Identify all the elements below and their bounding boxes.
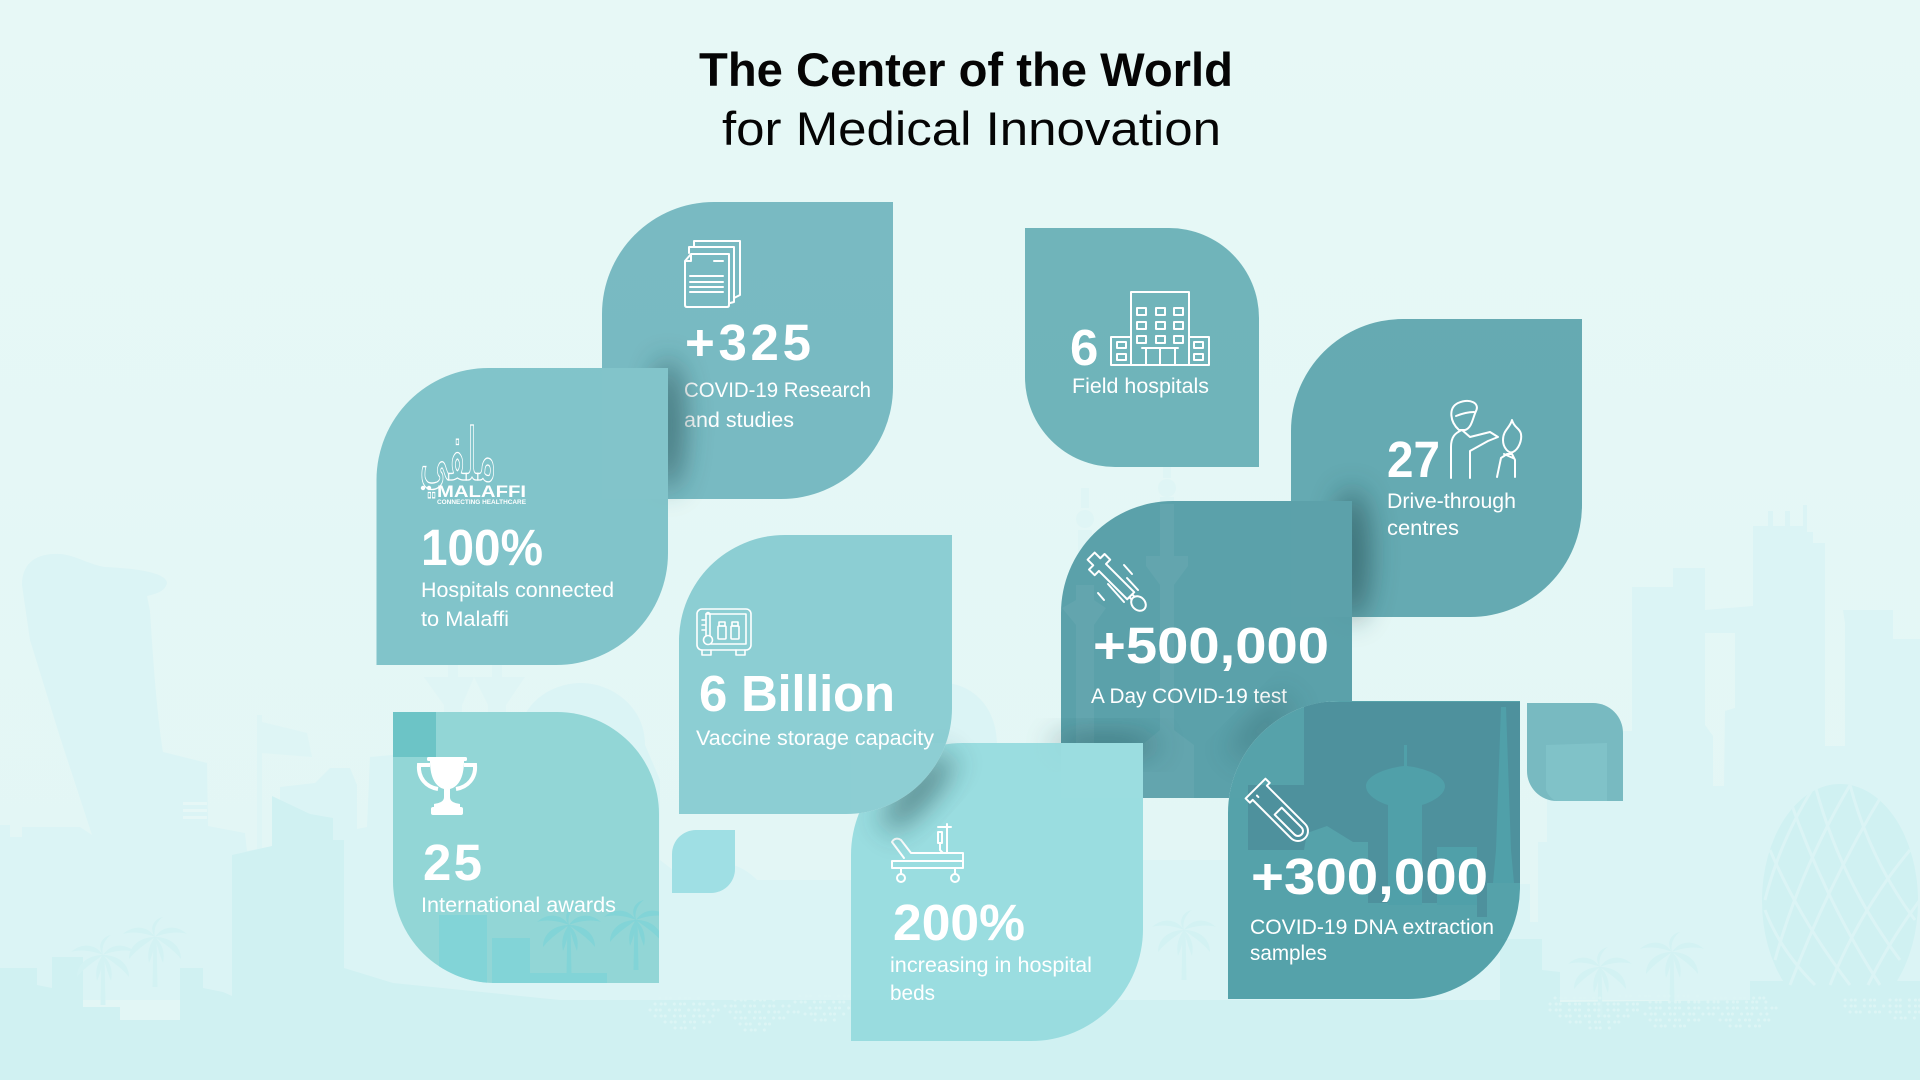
icon: vaccine fridge <box>697 609 751 655</box>
number: 6 <box>1070 319 1098 376</box>
decorative small leaf: left <box>672 830 735 893</box>
panel: Malaffi <box>376 368 668 665</box>
number: 6 Billion <box>699 665 895 722</box>
shadow of the test panel <box>1334 489 1370 621</box>
number: +300,000 <box>1251 848 1488 905</box>
label: increasing in hospital <box>890 954 1092 977</box>
title <box>699 43 1233 155</box>
title: for Medical Innovation <box>722 102 1221 155</box>
panel: awards <box>393 712 668 983</box>
panel: DNA samples: samples <box>1250 942 1327 965</box>
panel: vaccine storage <box>679 535 952 814</box>
icon: swab <box>1083 548 1152 617</box>
number: +325 <box>685 314 811 371</box>
label: Vaccine storage capacity <box>696 727 935 750</box>
panel: hospital beds <box>851 743 1143 1041</box>
logo: Malaffi: MALAFFI <box>437 482 526 501</box>
title: The Center of the World <box>699 43 1233 96</box>
logo: Malaffi: ملفي <box>420 414 496 498</box>
logo: Malaffi <box>420 414 527 506</box>
label: Field hospitals <box>1072 375 1209 398</box>
decorative small leaf: right <box>1527 703 1623 801</box>
label: A Day COVID-19 test <box>1091 685 1287 708</box>
number: 200% <box>893 894 1025 951</box>
panel: drive-through centres <box>1291 319 1582 617</box>
number: +500,000 <box>1093 617 1329 674</box>
panel: research <box>602 202 893 499</box>
shadow of the vaccine panel <box>875 746 961 838</box>
shadow of the beds panel <box>1050 736 1160 754</box>
panel: field hospitals <box>1025 228 1259 467</box>
logo: Malaffi: CONNECTING HEALTHCARE <box>437 499 527 506</box>
number: 27 <box>1387 431 1440 488</box>
number: 25 <box>423 834 482 891</box>
panel: hospital beds: beds <box>890 982 935 1005</box>
panel: drive-through centres: centres <box>1387 517 1459 540</box>
label: Hospitals connected <box>421 579 614 602</box>
label: Drive-through <box>1387 490 1516 513</box>
shadow of the Malaffi panel <box>652 359 684 491</box>
icon: test tube <box>1246 779 1315 848</box>
icon: trophy <box>419 757 475 815</box>
panel: daily tests <box>1061 501 1352 798</box>
label: COVID-19 Research <box>684 379 871 402</box>
icon: hospital bed <box>892 824 963 882</box>
panel: DNA samples <box>1228 701 1520 999</box>
label: International awards <box>421 894 616 917</box>
panel: research: and studies <box>684 409 794 432</box>
shadow of the DNA panel <box>1225 691 1299 765</box>
background skyline <box>0 455 1920 1080</box>
number: 100% <box>421 519 543 576</box>
icon: documents <box>685 241 740 307</box>
panel: Malaffi: to Malaffi <box>421 608 509 631</box>
label: COVID-19 DNA extraction <box>1250 916 1494 939</box>
icon: hospital building <box>1111 292 1209 365</box>
icon: doctor swabbing patient <box>1451 401 1521 478</box>
